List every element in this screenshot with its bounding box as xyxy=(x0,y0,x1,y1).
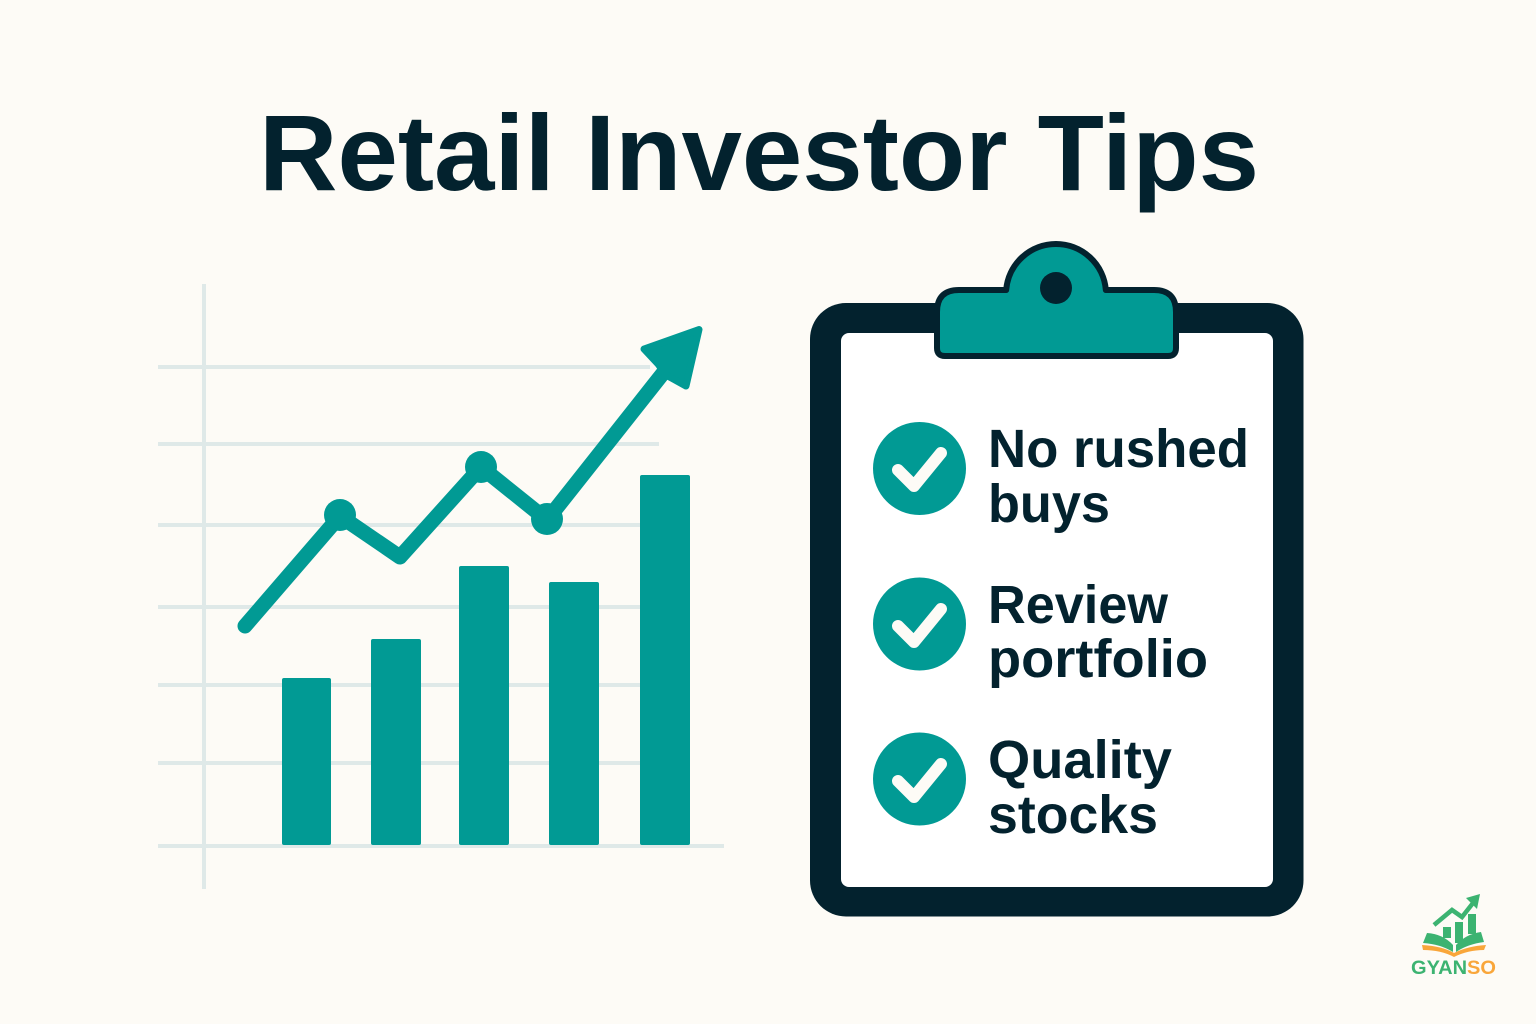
checklist item: review portfolio xyxy=(873,575,1208,689)
clip hole xyxy=(1040,272,1072,304)
text: review portfolio: Review xyxy=(988,575,1169,635)
text: quality stocks xyxy=(988,730,1172,845)
trend line with arrow xyxy=(245,330,699,626)
icon: logo arrow xyxy=(1434,894,1480,925)
text: no rushed buys: buys xyxy=(988,474,1110,534)
icon: check xyxy=(873,578,966,670)
text: review portfolio: portfolio xyxy=(988,629,1208,689)
icon: arrow head xyxy=(644,330,699,386)
text: quality stocks: stocks xyxy=(988,785,1158,845)
text: no rushed buys: No rushed xyxy=(988,419,1249,479)
text: quality stocks: Quality xyxy=(988,730,1172,790)
checklist item: no rushed buys xyxy=(873,419,1249,534)
icon: check xyxy=(873,422,966,515)
title: Retail Investor Tips xyxy=(259,92,1259,213)
bar chart xyxy=(282,475,690,845)
icon: logo bars xyxy=(1443,914,1476,943)
clipboard board xyxy=(810,303,1304,916)
icon: logo book xyxy=(1422,932,1486,957)
icon: check xyxy=(873,732,966,826)
panel: clipboard xyxy=(810,244,1304,916)
logo: Gyanso xyxy=(1411,894,1496,979)
text: no rushed buys xyxy=(988,419,1249,534)
chart: growth bars and trend line xyxy=(158,284,724,889)
logo wordmark: GYANSO xyxy=(1411,958,1496,979)
chart grid xyxy=(158,284,724,889)
clipboard clip xyxy=(937,244,1176,356)
text: review portfolio xyxy=(988,575,1208,689)
checklist item: quality stocks xyxy=(873,730,1172,845)
